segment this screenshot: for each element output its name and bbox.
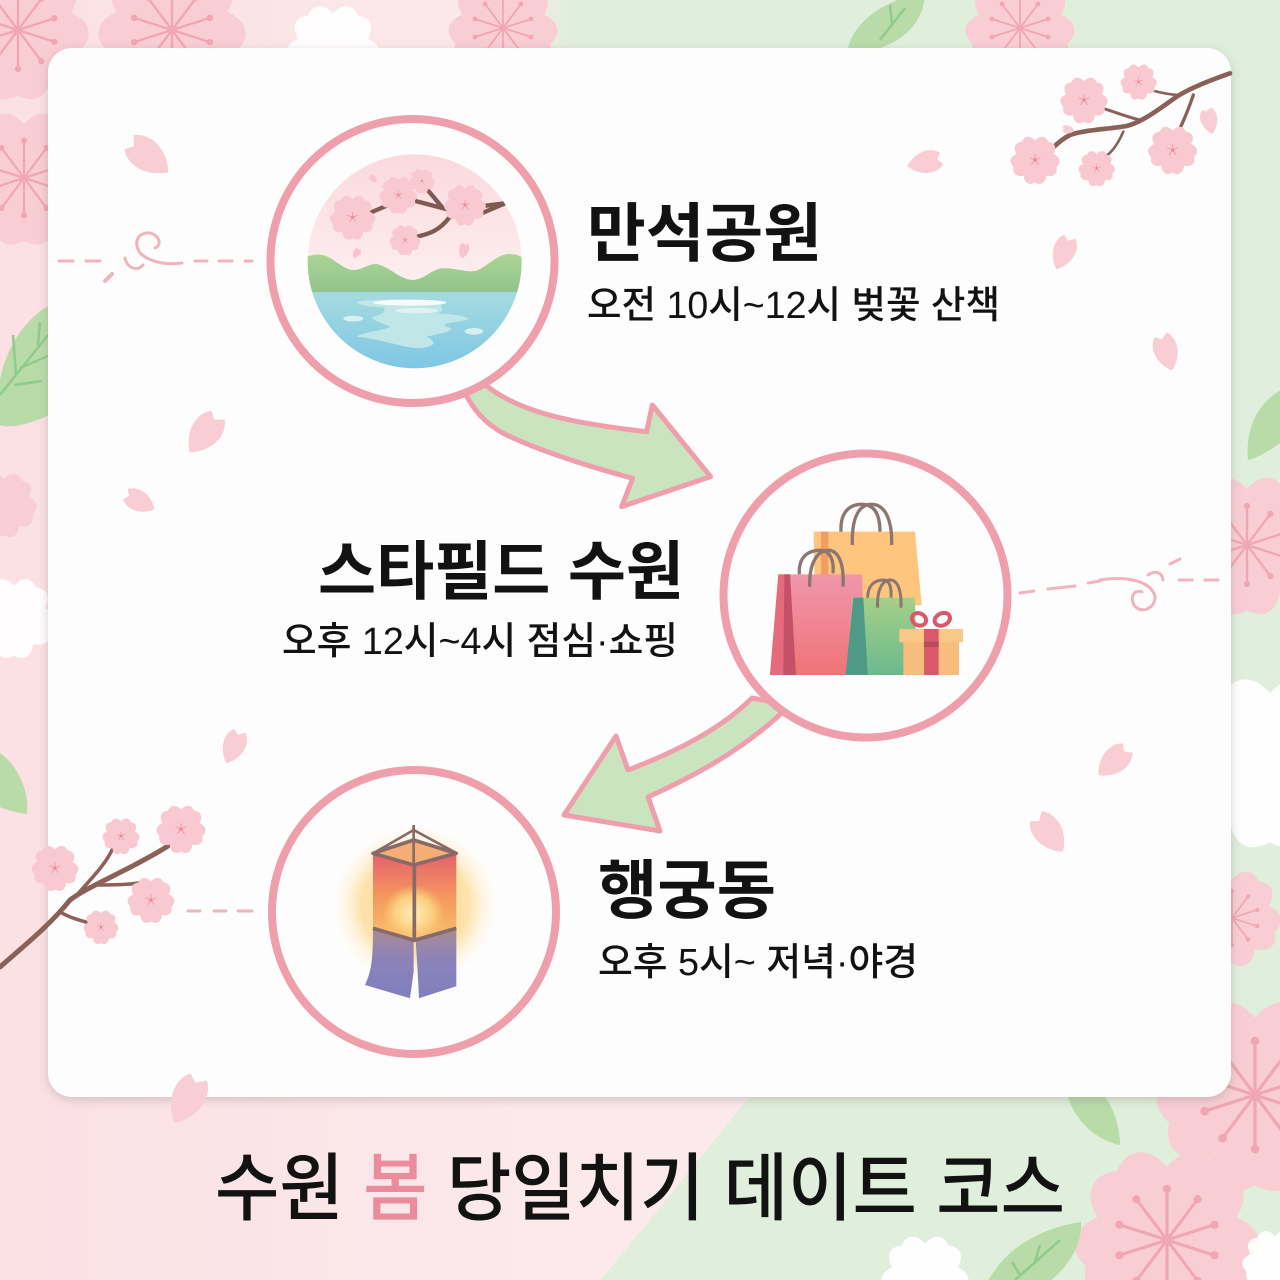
time: 오후 5시~ 저녁·야경: 오후 5시~ 저녁·야경 [598, 942, 918, 984]
time: 오후 12시~4시 점심·쇼핑: 오후 12시~4시 점심·쇼핑 [282, 621, 678, 663]
stop 3 circle: glowing lantern [272, 770, 556, 1054]
arrow: 만석공원 to 스타필드 수원 [463, 383, 711, 507]
decorative dashed flourish: lower left [188, 910, 252, 912]
scattered petals [119, 107, 1220, 1131]
main white card [48, 48, 1231, 1097]
stop 1 circle: lake and cherry blossoms [270, 119, 554, 403]
decorative branch: top right [1009, 64, 1230, 188]
arrow: 스타필드 수원 to 행궁동 [564, 698, 790, 831]
stop 3 text [598, 855, 918, 984]
stop 2 text [282, 536, 684, 663]
decorative dashed flourish: left [59, 233, 252, 281]
title: 수원 봄 당일치기 데이트 코스 [215, 1147, 1065, 1230]
stop 1 text [587, 198, 1000, 327]
stop 2 circle: shopping bags and gift [724, 454, 1008, 738]
decorative dashed flourish: right [1020, 559, 1218, 610]
decorative branch: bottom left [0, 806, 207, 967]
heading: 행궁동: 행궁동 [598, 855, 776, 927]
time: 오전 10시~12시 벚꽃 산책: 오전 10시~12시 벚꽃 산책 [587, 285, 1000, 327]
heading: 스타필드 수원: 스타필드 수원 [318, 536, 684, 608]
heading: 만석공원: 만석공원 [587, 198, 822, 270]
